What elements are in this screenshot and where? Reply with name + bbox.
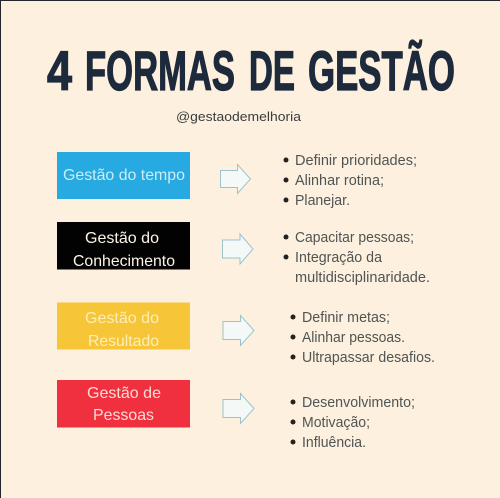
panel: gestão de pessoas xyxy=(57,380,190,428)
panel: gestão do conhecimento: Conhecimento xyxy=(73,253,175,270)
list: resultado: Alinhar pessoas. xyxy=(302,329,405,346)
arrow: conhecimento xyxy=(222,234,253,264)
title: DE xyxy=(249,39,295,102)
list: pessoas: Influência. xyxy=(302,434,366,451)
title: 4 xyxy=(47,39,72,102)
list: resultado: Definir metas; xyxy=(302,309,390,326)
list: resultado: Ultrapassar desafios. xyxy=(302,349,435,366)
list: pessoas xyxy=(290,394,415,451)
list: conhecimento: Integração da xyxy=(295,249,383,266)
panel: gestão do conhecimento xyxy=(57,222,190,270)
title: FORMAS xyxy=(85,39,235,102)
list: tempo: Definir prioridades; xyxy=(295,152,417,169)
panel: gestão do tempo: Gestão do tempo xyxy=(63,167,185,184)
panel: gestão do tempo xyxy=(57,152,190,199)
arrow: resultado xyxy=(223,316,254,346)
list: tempo: Alinhar rotina; xyxy=(295,172,384,189)
list: tempo xyxy=(284,152,417,209)
panel: gestão do resultado: Gestão do xyxy=(85,310,159,327)
list: conhecimento xyxy=(284,229,430,286)
panel: gestão de pessoas: Pessoas xyxy=(93,407,154,424)
panel: gestão do resultado xyxy=(57,302,190,350)
list: tempo: Planejar. xyxy=(295,192,350,209)
list: pessoas: Desenvolvimento; xyxy=(302,394,415,411)
list: conhecimento: multidisciplinaridade. xyxy=(295,269,430,286)
panel: gestão do resultado: Resultado xyxy=(88,333,159,350)
panel: gestão do conhecimento: Gestão do xyxy=(85,230,159,247)
handle: @gestaodemelhoria xyxy=(176,109,302,124)
panel: gestão de pessoas: Gestão de xyxy=(87,385,161,402)
arrow: tempo xyxy=(220,164,250,194)
list: pessoas: Motivação; xyxy=(302,414,370,431)
list: resultado xyxy=(290,309,435,366)
list: conhecimento: Capacitar pessoas; xyxy=(295,229,414,246)
arrow: pessoas xyxy=(223,394,254,424)
title xyxy=(47,39,455,102)
